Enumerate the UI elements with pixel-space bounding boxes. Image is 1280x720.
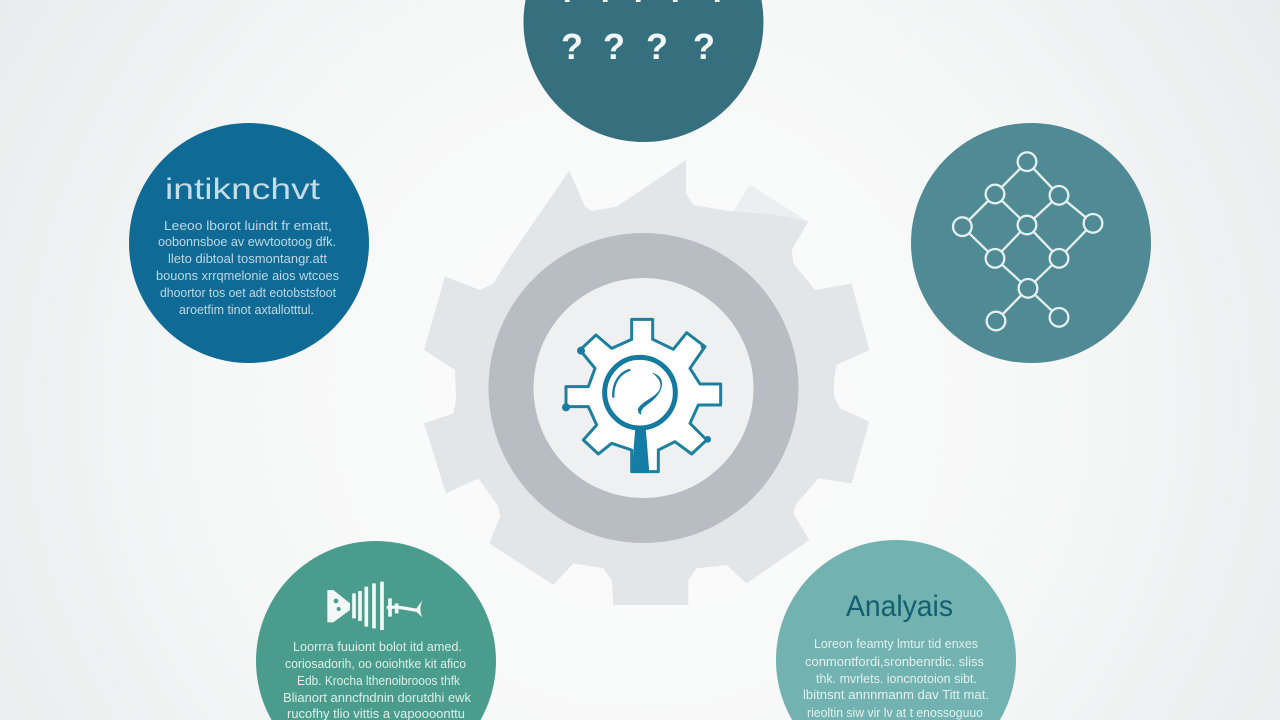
body text: Loorrra fuuiont bolot itd amed. <box>293 639 462 654</box>
large background gear <box>424 160 869 605</box>
body text: bouons xrrqmelonie aios wtcoes <box>156 268 339 283</box>
icon: fishbone <box>327 582 423 630</box>
heading: Analyais <box>846 590 953 623</box>
panel: left blue text circle <box>129 123 369 363</box>
icon: gear with magnifying glass <box>562 319 721 473</box>
body text: oobonnsboe av ewvtootoog dfk. <box>158 234 336 249</box>
panel: top question marks <box>524 0 764 142</box>
second row of question marks: ? <box>693 26 715 67</box>
body text: rieoltin siw vir lv at t enossoguuo <box>807 705 983 720</box>
grey gear ring <box>488 233 798 543</box>
body text: lbitnsnt annnmanm dav Titt mat. <box>803 687 989 702</box>
panel: right network circle <box>911 123 1151 363</box>
body text: Blianort anncfndnin dorutdhi ewk <box>283 690 471 705</box>
second row of question marks: ? <box>646 26 668 67</box>
second row of question marks: ? <box>603 26 625 67</box>
icon: node network <box>953 152 1102 330</box>
body text <box>283 639 471 720</box>
body text <box>803 636 989 720</box>
body text <box>156 218 339 317</box>
second row of question marks <box>561 26 715 67</box>
second row of question marks: ? <box>561 26 583 67</box>
body text: Edb. Krocha lthenoibrooos thfk <box>297 673 460 688</box>
body text: thk. mvrlets. ioncnotoion sibt. <box>816 671 977 686</box>
heading: intiknchvt <box>165 173 321 206</box>
panel: bottom left fishbone circle <box>256 541 496 720</box>
body text: conmontfordi,sronbenrdic. sliss <box>805 654 984 669</box>
panel: bottom right analysis circle <box>776 540 1016 720</box>
first row of question marks <box>558 0 728 9</box>
body text: dhoortor tos oet adt eotobstsfoot <box>160 285 336 300</box>
body text: Loreon feamty lmtur tid enxes <box>814 636 978 651</box>
body text: coriosadorih, oo ooiohtke kit afico <box>285 656 466 671</box>
body text: lleto dibtoal tosmontangr.att <box>168 251 327 266</box>
inner gear hub <box>534 278 754 498</box>
body text: Leeoo lborot luindt fr ematt, <box>164 218 332 233</box>
body text: aroetfim tinot axtallotttul. <box>179 302 314 317</box>
